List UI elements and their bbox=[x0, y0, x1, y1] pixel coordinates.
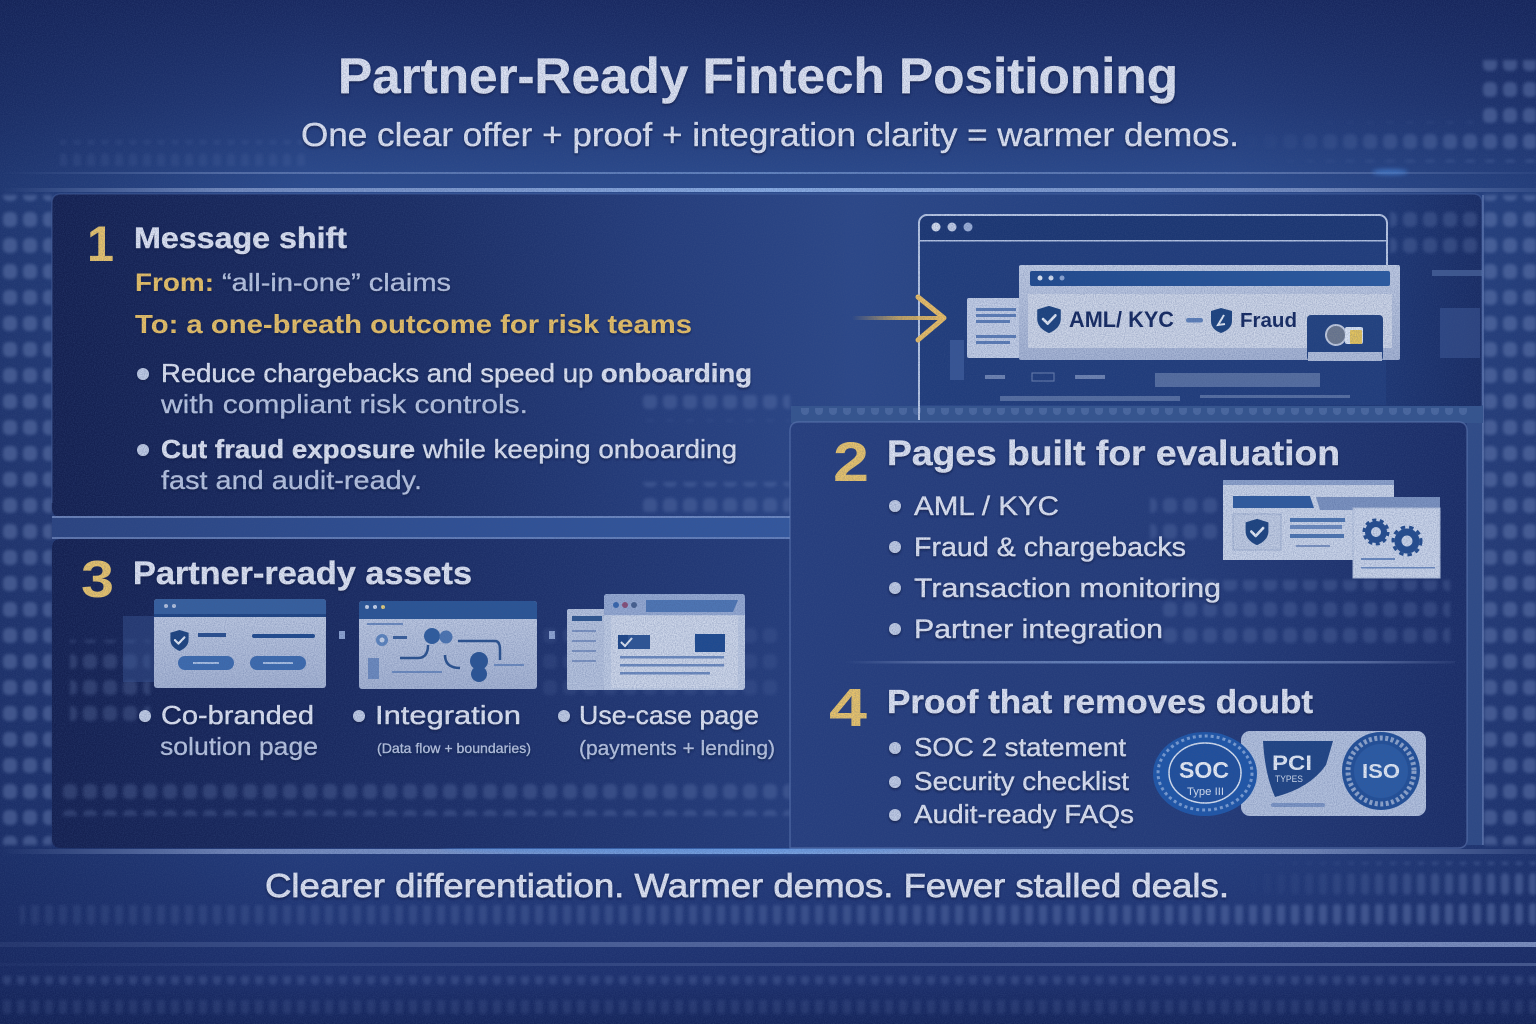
thumbnail: integration bbox=[359, 601, 537, 689]
heading: message shift: From: bbox=[135, 269, 214, 297]
bullets: outcomes bbox=[137, 358, 752, 495]
thumbnail: co-branded page bbox=[123, 599, 326, 688]
labels: assets: (Data flow + boundaries) bbox=[377, 740, 531, 756]
panel: pages and proof bbox=[790, 422, 1467, 848]
thumbnail: use-case page bbox=[567, 594, 745, 690]
panel: partner-ready assets bbox=[52, 539, 791, 848]
illustration: evaluation pages bbox=[1223, 480, 1440, 578]
icon: gears bbox=[1364, 520, 1421, 555]
list: pages: Transaction monitoring bbox=[914, 573, 1221, 603]
heading: message shift: Message shift bbox=[134, 222, 347, 255]
heading: proof: Proof that removes doubt bbox=[887, 683, 1313, 720]
badge: ISO: ISO bbox=[1362, 761, 1400, 783]
list: pages bbox=[889, 491, 1221, 644]
list: proof: SOC 2 statement bbox=[914, 732, 1127, 762]
badge: SOC: Type III bbox=[1187, 786, 1224, 798]
icon: shield check bbox=[1037, 306, 1061, 333]
labels: assets: Use-case page bbox=[579, 700, 759, 730]
side document bbox=[967, 298, 1027, 358]
list: proof: Security checklist bbox=[914, 766, 1130, 796]
icon: fraud shield bbox=[1211, 308, 1232, 333]
badge: ISO bbox=[1342, 732, 1420, 810]
labels: assets: Integration bbox=[375, 700, 521, 730]
list: pages: AML / KYC bbox=[914, 491, 1059, 521]
badge: PCI: PCI bbox=[1272, 752, 1312, 775]
number 1: 1 bbox=[87, 216, 114, 272]
heading: partner-ready assets: Partner-ready assets bbox=[133, 555, 472, 591]
labels: assets: Co-branded bbox=[161, 700, 314, 730]
heading: message shift: To: a one-breath outcome for risk teams bbox=[135, 309, 692, 339]
arrow bbox=[852, 297, 944, 340]
list: proof bbox=[889, 732, 1134, 829]
labels: assets: (payments + lending) bbox=[579, 738, 775, 760]
number 3: 3 bbox=[81, 551, 114, 609]
browser mockup bbox=[919, 215, 1400, 420]
badge: SOC bbox=[1153, 732, 1257, 816]
label: Fraud: Fraud bbox=[1240, 310, 1297, 332]
panel texture dots bbox=[640, 210, 1480, 512]
bullets: outcomes: fast and audit-ready. bbox=[161, 465, 422, 495]
labels: assets bbox=[139, 700, 775, 761]
front card bbox=[1019, 265, 1400, 361]
heading: message shift: “all-in-one” claims bbox=[222, 269, 451, 297]
bullets: outcomes: with compliant risk controls. bbox=[160, 389, 528, 419]
list: proof: Audit-ready FAQs bbox=[914, 799, 1134, 829]
number 2: 2 bbox=[833, 430, 869, 493]
title: Partner-Ready Fintech Positioning bbox=[338, 48, 1178, 104]
subtitle: One clear offer + proof + integration clarity = warmer demos. bbox=[301, 116, 1239, 153]
footer tagline: Clearer differentiation. Warmer demos. Fewer stalled deals. bbox=[265, 867, 1229, 904]
bullets: outcomes: Reduce chargebacks and speed up onboarding bbox=[161, 358, 752, 388]
list: pages: Fraud & chargebacks bbox=[914, 532, 1186, 562]
bullets: outcomes: Cut fraud exposure while keeping onboarding bbox=[161, 434, 737, 464]
badge: PCI bbox=[1263, 741, 1333, 807]
badges: compliance bbox=[1153, 731, 1426, 816]
heading: message shift bbox=[134, 222, 692, 339]
badge: SOC: SOC bbox=[1179, 757, 1229, 783]
list: pages: Partner integration bbox=[914, 614, 1163, 644]
small lock card bbox=[1307, 315, 1383, 361]
heading: pages built: Pages built for evaluation bbox=[887, 434, 1340, 473]
right column strip bbox=[1467, 195, 1484, 845]
label: AML/KYC: AML/ KYC bbox=[1069, 307, 1174, 332]
badge: PCI: TYPES bbox=[1275, 774, 1303, 784]
panel: message shift bbox=[52, 194, 1483, 539]
labels: assets: solution page bbox=[160, 733, 318, 761]
number 4: 4 bbox=[829, 678, 867, 738]
